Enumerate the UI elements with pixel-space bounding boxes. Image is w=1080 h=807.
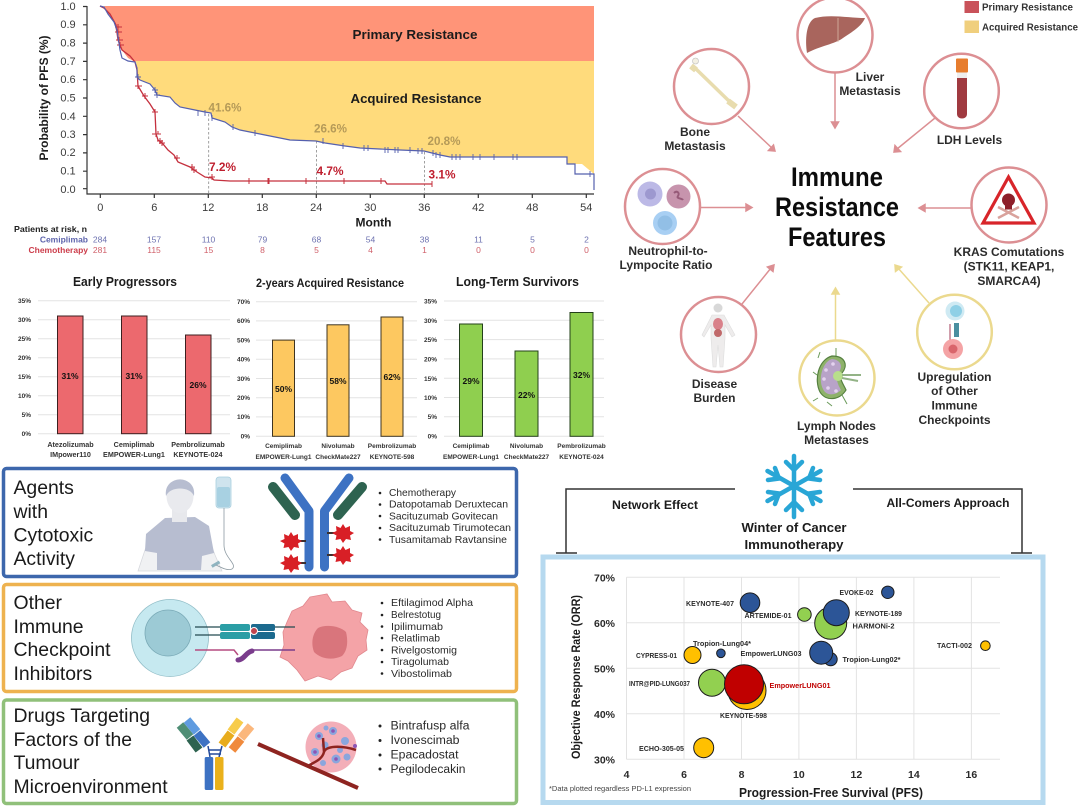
- patients at risk table: 115: [147, 245, 161, 255]
- icon: bispecific antibody: [180, 720, 251, 790]
- bubble labels: [629, 588, 972, 753]
- axis ticks: 30%: [424, 318, 437, 325]
- feature: disease burden: [681, 297, 756, 405]
- bar values: 32%: [573, 370, 590, 380]
- axis ticks: 5%: [22, 412, 31, 419]
- drug list: [379, 487, 511, 546]
- y axis title: Probability of PFS (%): [39, 35, 51, 161]
- arrow: bone to features: [738, 116, 775, 151]
- bar values: 31%: [125, 371, 143, 381]
- cemiplimab percentages: 26.6%: [314, 124, 347, 136]
- drug list: Sacituzumab Govitecan: [389, 510, 498, 522]
- heading: Checkpoint: [14, 639, 111, 661]
- category labels: EMPOWER-Lung1: [103, 450, 165, 459]
- label: [918, 370, 992, 427]
- patients at risk table: 54: [366, 234, 375, 244]
- patients at risk table: 8: [260, 245, 265, 255]
- label: [620, 244, 712, 272]
- label: Checkpoints: [918, 413, 991, 427]
- y axis tick labels: 0.8: [60, 38, 76, 50]
- label: Neutrophil-to-: [628, 244, 708, 258]
- y axis tick labels: 0.2: [60, 147, 76, 159]
- x axis tick labels: 42: [472, 202, 484, 214]
- category labels: CheckMate227: [315, 454, 361, 461]
- drug list: [378, 720, 470, 776]
- category labels: Cemiplimab: [265, 443, 302, 450]
- axis ticks: 25%: [424, 337, 437, 344]
- category labels: Pembrolizumab: [368, 443, 416, 450]
- cemiplimab curve: [100, 6, 594, 190]
- panel: agents with cytotoxic activity: [4, 468, 516, 576]
- x axis tick labels: 48: [526, 202, 538, 214]
- panel: other immune checkpoint inhibitors: [4, 584, 516, 692]
- axis ticks: 70%: [237, 299, 250, 306]
- patients at risk table: 38: [420, 234, 429, 244]
- heading: Tumour: [14, 752, 80, 774]
- x axis labels: 12: [851, 769, 862, 781]
- x axis labels: 6: [681, 769, 687, 781]
- drug list: Epacadostat: [390, 750, 459, 762]
- heading: immune resistance features: [775, 162, 899, 252]
- chart title: 2-years Acquired Resistance: [256, 276, 404, 290]
- patients at risk table: 157: [147, 234, 161, 244]
- icon: lymph node: [800, 340, 874, 416]
- drug list: [381, 597, 473, 680]
- chart title: Early Progressors: [73, 274, 177, 289]
- bubble labels: KEYNOTE-189: [855, 609, 902, 618]
- x axis tick labels: 6: [151, 202, 157, 214]
- x axis tick labels: [97, 202, 592, 214]
- feature: upregulation of other immune checkpoints: [917, 295, 992, 427]
- label: [692, 377, 738, 405]
- patients at risk table: 2: [584, 234, 589, 244]
- x axis labels: 8: [739, 769, 745, 781]
- axis ticks: 0%: [428, 434, 437, 440]
- label: Lympocite Ratio: [620, 258, 712, 272]
- bubble labels: EVOKE-02: [840, 588, 874, 597]
- icon: T cell and tumour cell checkpoint: [132, 594, 368, 681]
- x axis tick labels: 12: [202, 202, 214, 214]
- axis ticks: 15%: [424, 376, 437, 383]
- label: of Other: [931, 384, 978, 398]
- heading: Other: [14, 592, 63, 614]
- label: Metastasis: [664, 139, 726, 153]
- axis ticks: 35%: [18, 298, 31, 305]
- arrow: KRAS to features: [919, 204, 972, 212]
- category labels: Pembrolizumab: [557, 443, 606, 450]
- chemotherapy curve: [100, 6, 432, 187]
- heading: [14, 592, 111, 685]
- icon: antibody drug conjugate: [273, 478, 362, 573]
- y axis labels: 60%: [594, 618, 616, 630]
- bubble labels: HARMONi-2: [852, 622, 894, 630]
- patients at risk table: 281: [93, 245, 107, 255]
- heading: Immune: [14, 616, 84, 638]
- bracket: all-comers approach: [853, 489, 1032, 553]
- axis ticks: [237, 299, 250, 440]
- y axis labels: [594, 572, 616, 766]
- cemiplimab percentages: [208, 102, 460, 148]
- axis ticks: 15%: [18, 374, 31, 381]
- drug list: Chemotherapy: [389, 487, 457, 499]
- heading: Agents: [14, 477, 74, 499]
- patients at risk table: 15: [204, 245, 213, 255]
- bars: [272, 317, 403, 436]
- x axis labels: 4: [624, 769, 630, 781]
- bubble labels: EmpowerLUNG01: [770, 681, 830, 690]
- y axis tick labels: 0.1: [60, 166, 76, 178]
- drug list: Eftilagimod Alpha: [391, 597, 473, 609]
- drug list: Datopotamab Deruxtecan: [389, 498, 508, 510]
- y axis labels: 70%: [594, 572, 616, 584]
- heading: immune resistance features: Immune: [791, 162, 883, 192]
- label: Disease: [692, 377, 738, 391]
- drug list: Tiragolumab: [391, 656, 449, 668]
- label: Liver: [856, 70, 885, 84]
- legend: [964, 1, 1078, 34]
- bubbles: [684, 586, 990, 758]
- legend: Primary Resistance: [982, 2, 1073, 14]
- x axis tick labels: 18: [256, 202, 268, 214]
- category labels: Pembrolizumab: [171, 440, 225, 449]
- bubble labels: Tropion-Lung02*: [842, 655, 901, 664]
- patients at risk table: 1: [422, 245, 427, 255]
- bar values: 50%: [275, 384, 292, 394]
- category labels: KEYNOTE-024: [173, 450, 223, 459]
- drug list: Bintrafusp alfa: [390, 720, 470, 732]
- cemiplimab percentages: 20.8%: [428, 136, 460, 148]
- category labels: [443, 443, 606, 461]
- x axis title: Progression-Free Survival (PFS): [739, 785, 923, 800]
- patients at risk table: 68: [312, 234, 321, 244]
- patients at risk table: 5: [314, 245, 319, 255]
- axis ticks: 50%: [237, 338, 250, 344]
- category labels: EMPOWER-Lung1: [256, 454, 312, 461]
- chemotherapy percentages: 7.2%: [209, 162, 236, 174]
- heading: Inhibitors: [14, 663, 92, 685]
- patients at risk table: Cemiplimab: [40, 234, 88, 244]
- chemotherapy percentages: 3.1%: [428, 170, 456, 182]
- heading: immune resistance features: Features: [788, 222, 886, 252]
- x axis labels: 16: [966, 769, 977, 781]
- bar chart: 2-years acquired resistance: [237, 276, 417, 461]
- icon: bone: [674, 49, 749, 124]
- feature: neutrophil-to-lymphocyte ratio: [620, 169, 712, 272]
- chemotherapy percentages: [209, 162, 456, 182]
- x axis tick labels: 54: [580, 202, 592, 214]
- chemotherapy percentages: 4.7%: [316, 166, 344, 178]
- label: KRAS Comutations: [954, 245, 1065, 259]
- arrow: neutrophil ratio to features: [700, 204, 752, 211]
- y axis tick labels: 0.0: [60, 184, 76, 196]
- x axis labels: 14: [908, 769, 920, 781]
- icon: body: [681, 297, 756, 372]
- y axis tick labels: [60, 1, 76, 196]
- heading: Activity: [14, 548, 75, 570]
- footnote: *Data plotted regardless PD-L1 expression: [549, 784, 691, 793]
- acquired resistance area: [136, 61, 594, 174]
- drug list: Ipilimumab: [391, 621, 443, 633]
- label: Metastases: [804, 433, 869, 447]
- category labels: EMPOWER-Lung1: [443, 454, 499, 461]
- bracket: network effect: [556, 489, 735, 553]
- x axis tick labels: 30: [364, 202, 376, 214]
- dashed guide lines: [209, 114, 424, 194]
- category labels: Nivolumab: [321, 443, 355, 450]
- feature: bone metastasis: [664, 49, 749, 153]
- y axis tick labels: 0.3: [60, 129, 76, 141]
- category labels: [47, 440, 225, 459]
- arrow: disease burden to features: [742, 265, 774, 304]
- label: SMARCA4): [977, 274, 1041, 288]
- heading: Microenvironment: [14, 776, 168, 798]
- y axis labels: 30%: [594, 754, 616, 766]
- drug list: Belrestotug: [391, 609, 441, 621]
- bubble labels: KEYNOTE-598: [720, 711, 767, 720]
- bubble labels: KEYNOTE-407: [686, 599, 734, 608]
- drug list: Ivonescimab: [390, 735, 460, 747]
- axis ticks: 20%: [18, 355, 31, 362]
- heading: Cytotoxic: [14, 524, 94, 546]
- primary resistance area: [104, 6, 594, 62]
- label: (STK11, KEAP1,: [964, 260, 1054, 274]
- y axis title: Objective Response Rate (ORR): [569, 595, 583, 759]
- chart title: Long-Term Survivors: [456, 274, 579, 289]
- heading: winter of cancer immunotherapy: Winter of Cancer: [742, 520, 846, 535]
- drug list: Sacituzumab Tirumotecan: [389, 522, 511, 534]
- x axis tick labels: 36: [418, 202, 430, 214]
- label: Burden: [694, 391, 736, 405]
- bar values: 62%: [383, 372, 401, 382]
- heading: with: [12, 501, 48, 523]
- axis ticks: 25%: [18, 336, 31, 343]
- patients at risk table: 284: [93, 234, 107, 244]
- y axis tick labels: 0.4: [60, 111, 76, 123]
- axis ticks: 30%: [237, 376, 250, 383]
- label: Upregulation: [918, 370, 992, 384]
- panel: bubble chart of ORR vs PFS: [543, 557, 1043, 802]
- axis ticks: 10%: [18, 393, 31, 400]
- axis ticks: 30%: [18, 317, 31, 324]
- label: [797, 419, 876, 447]
- x axis tick labels: 0: [97, 202, 103, 214]
- category labels: Cemiplimab: [453, 443, 489, 450]
- bar values: [462, 370, 590, 400]
- icon: tumour with blood vessel: [258, 722, 358, 788]
- drug list: Vibostolimab: [391, 668, 452, 680]
- axis ticks: 40%: [237, 356, 250, 364]
- category labels: KEYNOTE-598: [370, 454, 415, 461]
- bar values: [61, 371, 207, 390]
- category labels: IMpower110: [50, 450, 91, 459]
- bar values: 29%: [462, 376, 480, 386]
- bar values: 31%: [61, 371, 79, 381]
- chart axes: [83, 6, 594, 198]
- feature: KRAS comutations: [954, 168, 1065, 288]
- y axis tick labels: 1.0: [60, 1, 76, 13]
- axis ticks: 0%: [22, 431, 31, 438]
- patients at risk table: Patients at risk, n: [14, 224, 87, 234]
- x axis title: Month: [356, 216, 391, 230]
- patients at risk table: Chemotherapy: [28, 245, 88, 255]
- axis ticks: 20%: [424, 356, 437, 364]
- heading: Drugs Targeting: [14, 705, 150, 727]
- cemiplimab percentages: 41.6%: [208, 102, 242, 114]
- label: network effect: Network Effect: [612, 498, 698, 512]
- patients at risk table: 4: [368, 245, 373, 255]
- heading: [14, 705, 168, 798]
- axis ticks: 10%: [237, 414, 250, 421]
- category labels: [256, 443, 416, 461]
- arrow: lymph nodes to features: [832, 288, 839, 340]
- patients at risk table: 0: [476, 245, 481, 255]
- heading: immune resistance features: Resistance: [775, 192, 899, 222]
- patients at risk table: 0: [530, 245, 535, 255]
- x axis tick labels: 24: [310, 202, 322, 214]
- drug list: Tusamitamab Ravtansine: [389, 534, 507, 546]
- axis ticks: 20%: [237, 395, 250, 402]
- bars: [58, 316, 211, 434]
- heading: [12, 477, 94, 570]
- label: primary resistance: Primary Resistance: [352, 27, 478, 42]
- label: Metastasis: [839, 84, 901, 98]
- bar chart: long-term survivors: [424, 274, 606, 461]
- bubble labels: TACTI-002: [937, 641, 972, 650]
- heading: winter of cancer immunotherapy: [742, 520, 846, 552]
- bubble labels: Tropion-Lung04*: [693, 639, 751, 648]
- category labels: CheckMate227: [504, 454, 549, 461]
- arrow: checkpoints to features: [895, 265, 929, 303]
- bar values: 22%: [518, 390, 535, 400]
- icon: hazard triangle: [972, 168, 1046, 242]
- label: all-comers approach: All-Comers Approach: [886, 496, 1010, 510]
- patients at risk table: 110: [202, 234, 216, 244]
- axis ticks: 5%: [428, 414, 437, 421]
- label: LDH Levels: [937, 133, 1003, 147]
- bubble labels: ARTEMIDE-01: [744, 611, 792, 620]
- panel: Kaplan-Meier PFS chart: [14, 1, 594, 255]
- legend: Acquired Resistance: [982, 22, 1078, 34]
- drug list: Relatlimab: [391, 632, 440, 644]
- axis ticks: 0%: [241, 434, 250, 440]
- icon: patient receiving infusion: [138, 477, 233, 571]
- axis ticks: 35%: [424, 298, 437, 306]
- category labels: Cemiplimab: [114, 440, 155, 449]
- y axis tick labels: 0.6: [60, 74, 76, 86]
- bar values: 26%: [189, 380, 207, 390]
- icon: checkpoint interaction: [917, 295, 992, 369]
- bar chart: early progressors: [18, 274, 230, 459]
- category labels: Atezolizumab: [47, 440, 94, 449]
- arrow: liver to features: [832, 73, 838, 128]
- arrow: LDH to features: [894, 118, 935, 152]
- category labels: Nivolumab: [510, 443, 543, 450]
- patients at risk table: 5: [530, 234, 535, 244]
- bubble labels: ECHO-305-05: [639, 744, 684, 753]
- patients at risk table: [14, 224, 589, 255]
- label: Lymph Nodes: [797, 419, 876, 433]
- patients at risk table: 11: [474, 234, 483, 244]
- label: [664, 125, 726, 153]
- y axis labels: 50%: [594, 664, 616, 676]
- label: [839, 70, 901, 98]
- bar values: [275, 372, 401, 394]
- axis ticks: [424, 298, 437, 440]
- panel: drugs targeting factors of the tumour microenvironment: [4, 700, 516, 804]
- y axis labels: 40%: [594, 709, 616, 721]
- heading: winter of cancer immunotherapy: Immunotherapy: [744, 537, 844, 552]
- feature: liver metastasis: [798, 0, 901, 98]
- bubble labels: EmpowerLUNG03: [740, 649, 802, 658]
- category labels: KEYNOTE-024: [559, 454, 604, 461]
- bubble labels: INTR@PID-LUNG037: [629, 679, 690, 688]
- feature: LDH levels: [924, 54, 1003, 147]
- axis ticks: 60%: [237, 318, 250, 325]
- bar values: 58%: [329, 376, 347, 386]
- icon: blood tube: [924, 54, 999, 128]
- feature: lymph nodes metastases: [797, 340, 876, 447]
- bars: [460, 312, 593, 436]
- x axis labels: 10: [793, 769, 805, 781]
- label: acquired resistance: Acquired Resistance: [350, 91, 482, 106]
- y axis tick labels: 0.5: [60, 92, 76, 104]
- y axis tick labels: 0.7: [60, 56, 76, 68]
- heading: Factors of the: [14, 729, 132, 751]
- y axis tick labels: 0.9: [60, 19, 76, 31]
- axis ticks: 10%: [424, 395, 437, 402]
- x axis labels: [624, 769, 977, 781]
- patients at risk table: 79: [258, 234, 267, 244]
- label: Immune: [931, 398, 978, 412]
- patients at risk table: 0: [584, 245, 589, 255]
- icon: immune cells: [625, 169, 700, 244]
- label: [954, 245, 1065, 288]
- icon: liver: [798, 0, 872, 72]
- drug list: Pegilodecakin: [390, 764, 466, 776]
- label: Bone: [680, 125, 710, 139]
- bubble labels: CYPRESS-01: [636, 651, 677, 660]
- drug list: Rivelgostomig: [391, 644, 457, 656]
- icon: snowflake: [768, 456, 820, 517]
- axis ticks: [18, 298, 31, 438]
